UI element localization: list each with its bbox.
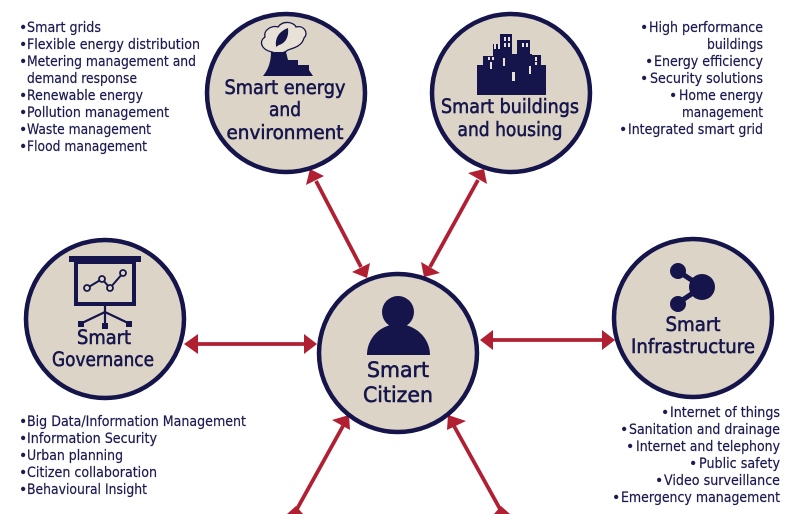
panel: smart citizen xyxy=(319,274,477,432)
text block: buildings list: • xyxy=(669,88,677,104)
label: Smart xyxy=(367,358,429,382)
arrow: buildings to citizen xyxy=(421,169,487,277)
text block: infrastructure list: Internet and telephony xyxy=(636,439,780,455)
text block: infrastructure list: Video surveillance xyxy=(664,473,780,489)
icon: city skyline xyxy=(477,34,546,95)
label: Smart xyxy=(666,313,721,336)
text block: governance list: Behavioural Insight xyxy=(27,482,147,498)
panel: smart governance xyxy=(26,240,184,398)
text block: infrastructure list: • xyxy=(620,422,628,438)
label xyxy=(363,358,433,407)
text block: governance list: Citizen collaboration xyxy=(27,465,157,481)
arrow: governance to citizen xyxy=(184,334,317,354)
icon: power plant with leaf cloud xyxy=(261,22,313,76)
label: Governance xyxy=(52,348,154,371)
text block: buildings list: • xyxy=(619,122,627,138)
text block: energy list: Flood management xyxy=(27,139,147,155)
label xyxy=(224,76,346,144)
text block: governance list: Big Data/Information Management xyxy=(27,414,246,430)
text block: infrastructure list: Emergency management xyxy=(621,490,780,506)
label: and housing xyxy=(458,118,562,141)
text block: energy list: Waste management xyxy=(27,122,151,138)
text block: infrastructure list: Public safety xyxy=(699,456,780,472)
text block: buildings list: Energy efficiency xyxy=(654,54,763,70)
label: Citizen xyxy=(363,383,433,407)
icon: share nodes xyxy=(670,263,715,312)
text block: infrastructure list: • xyxy=(612,490,620,506)
label: Infrastructure xyxy=(631,335,755,358)
panel: smart infrastructure xyxy=(614,239,772,397)
text block: energy list: Smart grids xyxy=(27,20,101,36)
text block: energy list: • xyxy=(19,88,27,104)
label: Smart xyxy=(77,326,131,349)
label: environment xyxy=(226,121,344,144)
text block: governance list: Urban planning xyxy=(27,448,123,464)
text block: energy list: • xyxy=(19,54,27,70)
text block: governance list xyxy=(19,414,246,498)
text block: buildings list xyxy=(619,20,763,138)
text block: energy list: Renewable energy xyxy=(27,88,143,104)
text block: infrastructure list: • xyxy=(655,473,663,489)
text block: buildings list: management xyxy=(682,105,763,121)
text block: energy list: • xyxy=(19,37,27,53)
icon: person xyxy=(367,296,430,355)
text block: buildings list: High performance xyxy=(649,20,763,36)
text block: energy list: • xyxy=(19,105,27,121)
text block: energy list: • xyxy=(19,122,27,138)
text block: infrastructure list: • xyxy=(689,456,697,472)
arrow: lower right to citizen xyxy=(447,415,510,514)
text block: governance list: Information Security xyxy=(27,431,157,447)
label: Smart buildings xyxy=(441,95,579,118)
text block: buildings list: • xyxy=(640,20,648,36)
text block: energy list: Pollution management xyxy=(27,105,169,121)
text block: infrastructure list: Sanitation and drainage xyxy=(629,422,780,438)
arrow: energy to citizen xyxy=(306,169,370,278)
text block: energy list: Metering management and xyxy=(27,54,196,70)
text block: infrastructure list: • xyxy=(661,405,669,421)
text block: buildings list: buildings xyxy=(707,37,763,53)
text block: energy list: demand response xyxy=(27,71,137,87)
text block: governance list: • xyxy=(19,431,27,447)
text block: governance list: • xyxy=(19,414,27,430)
panel: smart energy and environment xyxy=(207,14,365,172)
text block: infrastructure list: • xyxy=(626,439,634,455)
text block: infrastructure list: Internet of things xyxy=(670,405,780,421)
text block: energy list: • xyxy=(19,20,27,36)
arrow: lower left to citizen xyxy=(287,415,350,514)
text block: governance list: • xyxy=(19,482,27,498)
arrow: infrastructure to citizen xyxy=(480,330,615,350)
label xyxy=(441,95,579,141)
text block: buildings list: Security solutions xyxy=(650,71,763,87)
text block: buildings list: • xyxy=(640,71,648,87)
label: and xyxy=(269,98,301,121)
label: Smart energy xyxy=(224,76,346,99)
icon: presentation board xyxy=(69,256,141,329)
text block: energy list: • xyxy=(19,139,27,155)
text block: governance list: • xyxy=(19,465,27,481)
text block: governance list: • xyxy=(19,448,27,464)
label xyxy=(631,313,755,358)
panel: smart buildings and housing xyxy=(432,14,590,172)
text block: energy list: Flexible energy distribution xyxy=(27,37,200,53)
text block: buildings list: Home energy xyxy=(679,88,763,104)
text block: infrastructure list xyxy=(612,405,780,506)
text block: buildings list: Integrated smart grid xyxy=(628,122,763,138)
text block: energy list xyxy=(19,20,200,155)
label xyxy=(52,326,154,371)
text block: buildings list: • xyxy=(645,54,653,70)
